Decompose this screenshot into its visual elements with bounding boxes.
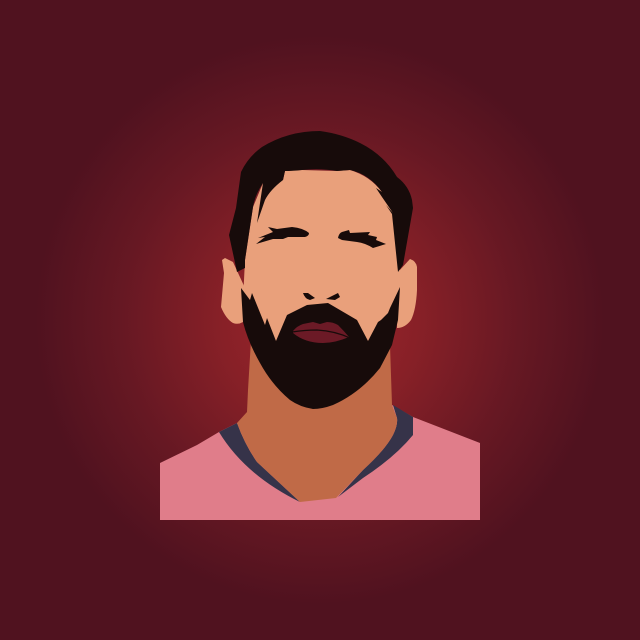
- neck: [237, 340, 397, 502]
- face: [243, 170, 400, 360]
- beard: [241, 287, 400, 409]
- nostril: right: [326, 293, 340, 300]
- hair: [229, 131, 413, 272]
- ear: left: [221, 258, 245, 324]
- eyebrow: left: [256, 227, 309, 244]
- nose: [303, 293, 340, 300]
- lips: [293, 322, 349, 343]
- ear: right: [397, 259, 417, 328]
- collar: [219, 405, 413, 502]
- nostril: left: [303, 293, 315, 300]
- collar: right: [338, 405, 413, 497]
- eyebrow: right: [338, 230, 386, 248]
- shirt: [160, 405, 480, 520]
- collar: left: [219, 423, 300, 502]
- mouth line: [292, 330, 350, 338]
